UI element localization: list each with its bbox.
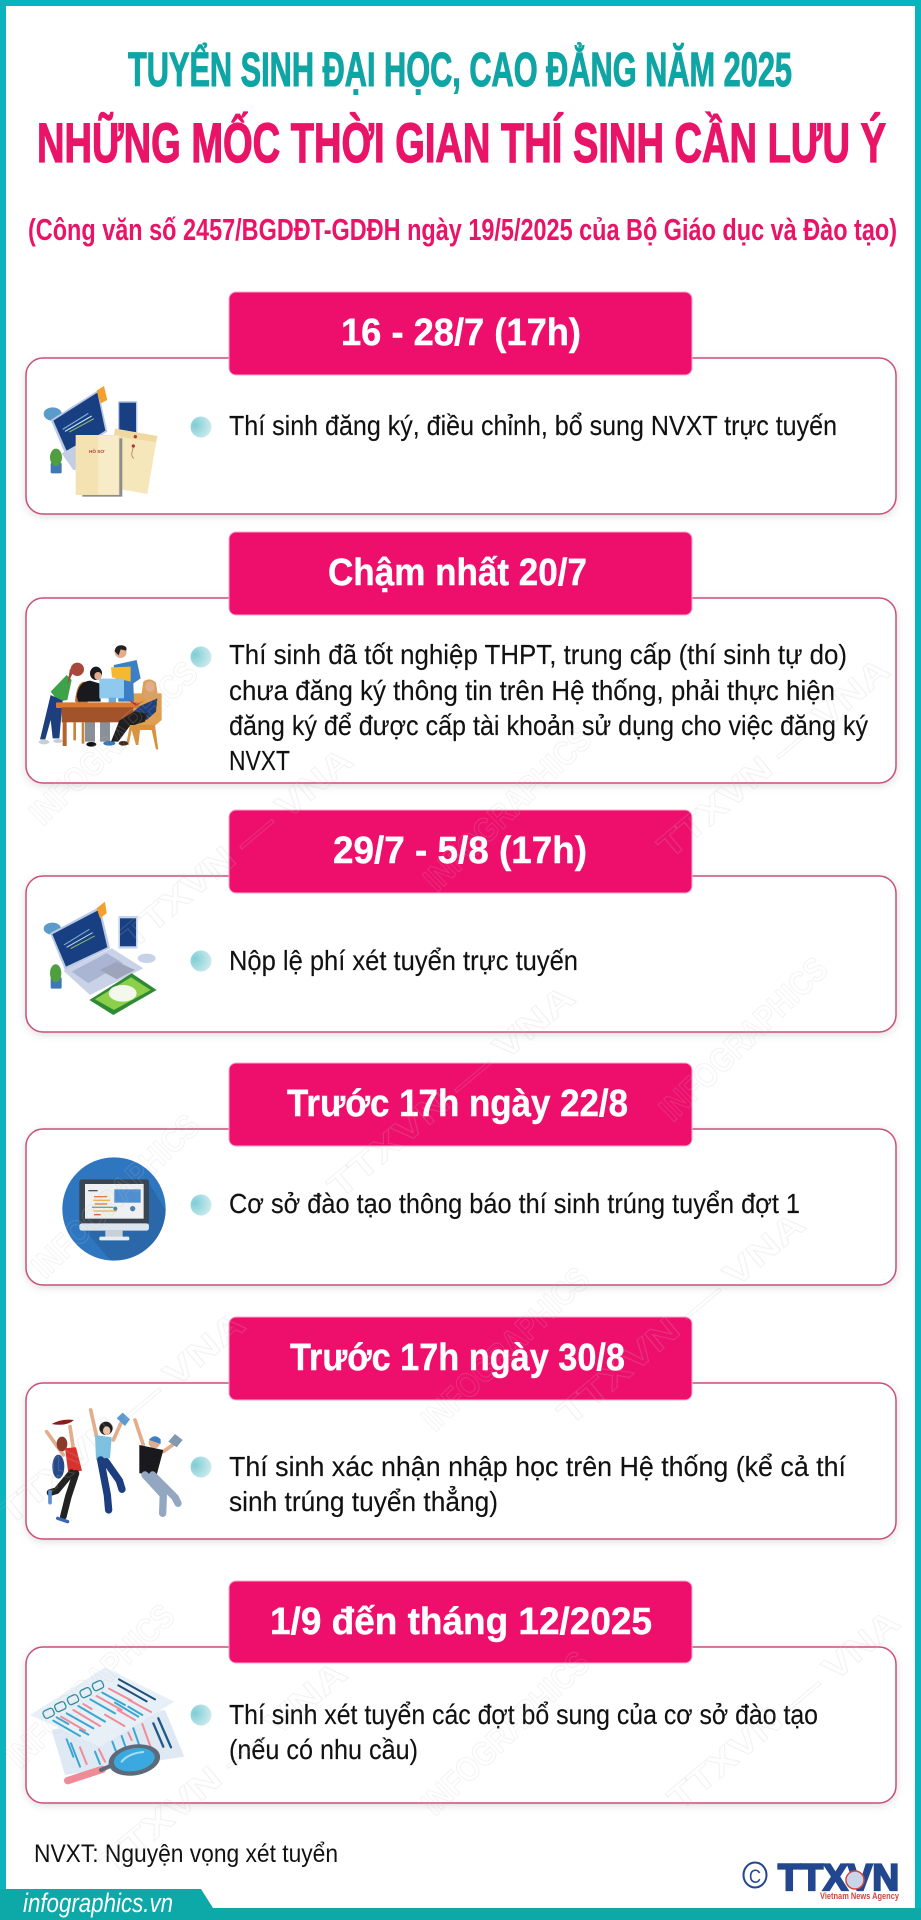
date badge — [229, 1317, 692, 1400]
watermark: INFOGRAPHICS — [22, 654, 205, 833]
icon: students at table — [39, 645, 162, 749]
card frame — [26, 598, 896, 783]
bullet — [190, 1194, 212, 1216]
date badge — [229, 1063, 692, 1146]
source: infographics.vn — [23, 1888, 173, 1918]
date badge — [229, 810, 692, 893]
logo: TTXVN — [744, 1857, 900, 1902]
text block: (nếu có nhu cầu) — [229, 1734, 418, 1765]
footer band — [0, 1888, 921, 1920]
watermark: INFOGRAPHICS — [24, 1107, 207, 1286]
date text: 16 - 28/7 (17h) — [341, 312, 581, 354]
watermark: TTXVN — VNA — [93, 1654, 355, 1882]
card frame — [26, 876, 896, 1032]
date badge — [229, 532, 692, 615]
icon: jumping students — [47, 1410, 183, 1522]
text block: chưa đăng ký thông tin trên Hệ thống, phải thực hiện — [229, 675, 835, 706]
panel 4 — [26, 1063, 896, 1285]
watermark — [0, 651, 907, 1882]
watermark: INFOGRAPHICS — [414, 1644, 597, 1823]
date badge — [229, 292, 692, 375]
globe mark — [846, 1871, 864, 1889]
footnote: NVXT: Nguyện vọng xét tuyển — [34, 1840, 338, 1868]
text block: Nộp lệ phí xét tuyển trực tuyến — [229, 945, 578, 976]
bullet — [190, 416, 212, 438]
icon: laptop and money — [44, 902, 157, 1015]
panel 6 — [26, 1581, 896, 1803]
watermark: INFOGRAPHICS — [414, 1260, 597, 1439]
date text: Chậm nhất 20/7 — [328, 552, 587, 594]
agency line: Vietnam News Agency — [820, 1891, 900, 1902]
watermark: TTXVN — VNA — [661, 1603, 907, 1818]
bullet — [190, 950, 212, 972]
text block: đăng ký để được cấp tài khoản sử dụng cho việc đăng ký — [229, 710, 868, 741]
watermark: INFOGRAPHICS — [0, 1597, 182, 1776]
text block: NVXT — [229, 745, 290, 776]
card frame — [26, 1129, 896, 1285]
date badge — [229, 1581, 692, 1663]
text block — [229, 1699, 818, 1765]
card frame — [26, 1647, 896, 1803]
watermark: INFOGRAPHICS — [652, 950, 835, 1129]
panel 5 — [26, 1317, 896, 1539]
date text: 1/9 đến tháng 12/2025 — [270, 1601, 652, 1643]
watermark: TTXVN — VNA — [551, 1205, 813, 1433]
watermark: TTXVN — VNA — [114, 741, 360, 956]
text block: Thí sinh đăng ký, điều chỉnh, bổ sung NVXT trực tuyến — [229, 410, 837, 441]
date text: 29/7 - 5/8 (17h) — [333, 830, 587, 872]
copyright mark: C — [749, 1867, 761, 1888]
card frame — [26, 1383, 896, 1539]
panel 1 — [26, 292, 896, 514]
bullet — [190, 1704, 212, 1726]
text block: Cơ sở đào tạo thông báo thí sinh trúng tuyển đợt 1 — [229, 1188, 800, 1219]
card frame — [26, 358, 896, 514]
text block — [229, 1451, 846, 1517]
panel 3 — [26, 810, 896, 1032]
icon: laptop and documents: HỒ SƠ — [89, 448, 104, 454]
icon: laptop and documents — [44, 386, 157, 497]
text block — [229, 639, 868, 776]
copyright mark — [744, 1862, 766, 1888]
text block: Thí sinh đã tốt nghiệp THPT, trung cấp (thí sinh tự do) — [229, 639, 847, 670]
date text: Trước 17h ngày 30/8 — [290, 1337, 625, 1379]
wordmark: TTXVN — [778, 1857, 899, 1898]
icon: monitor badge — [62, 1157, 166, 1261]
watermark: TTXVN — VNA — [321, 978, 583, 1206]
text block: Thí sinh xác nhận nhập học trên Hệ thống (kể cả thí — [229, 1451, 846, 1482]
panel 2 — [26, 532, 896, 783]
text block: sinh trúng tuyển thẳng) — [229, 1485, 498, 1517]
bullet — [190, 1456, 212, 1478]
date text: Trước 17h ngày 22/8 — [287, 1083, 628, 1125]
bullet — [190, 646, 212, 668]
icon: documents and magnifier — [30, 1667, 184, 1781]
watermark: INFOGRAPHICS — [416, 720, 599, 899]
watermark: TTXVN — VNA — [651, 651, 897, 866]
text block: Thí sinh xét tuyển các đợt bổ sung của cơ sở đào tạo — [229, 1699, 818, 1730]
